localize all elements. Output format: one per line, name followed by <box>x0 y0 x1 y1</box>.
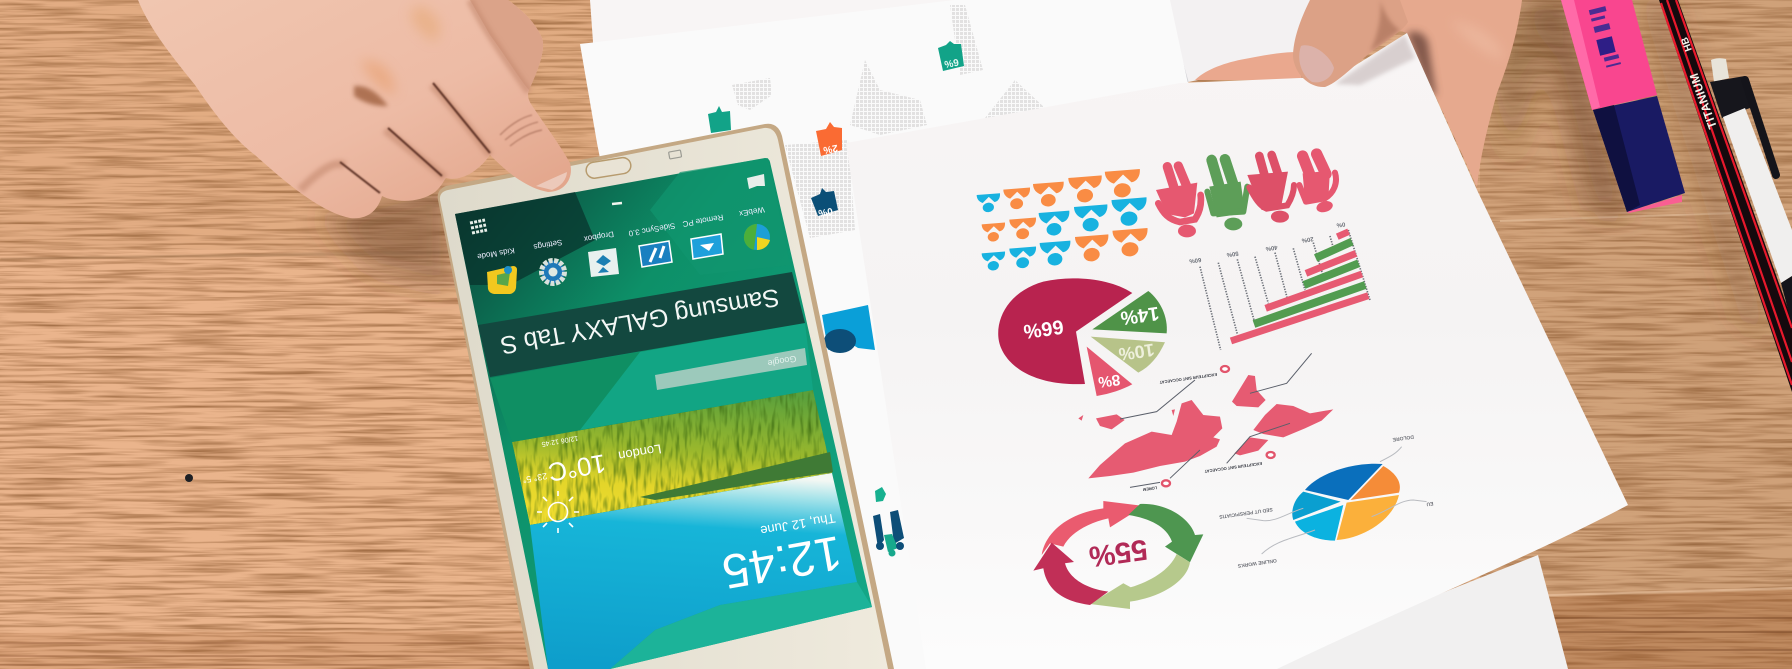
home button <box>585 157 632 179</box>
black and red pencil: HB <box>1680 35 1695 53</box>
app icon: Dropbox: Dropbox <box>583 229 615 244</box>
finger shading <box>300 0 529 190</box>
black and red pencil: TITANIUM <box>1687 71 1720 131</box>
soft shadows on the desk <box>320 0 1770 340</box>
icon row: small inverted people <box>977 169 1148 270</box>
back finger <box>470 0 543 90</box>
notification flag icon <box>747 174 765 189</box>
barcode <box>1589 6 1621 68</box>
app icon: Kids Mode: Kids Mode <box>476 246 515 261</box>
front camera icon <box>669 150 682 159</box>
temperature: 10°C <box>546 448 608 488</box>
pink highlighter with navy cap <box>1561 0 1685 213</box>
clock 12:45: 12:45 <box>718 525 846 598</box>
colour pie chart with labels <box>1218 433 1434 568</box>
world map with callouts: LOREM <box>1142 485 1157 492</box>
circular arrows with 55% <box>1033 501 1203 609</box>
app icon: Settings: Settings <box>533 238 563 251</box>
app icon: Settings <box>533 238 564 284</box>
black and white pen <box>1710 58 1792 325</box>
tag: 2%: 2% <box>822 142 839 155</box>
weather widget: grass photo <box>512 390 832 525</box>
left hand <box>138 0 571 218</box>
forefinger of right hand <box>1195 52 1302 80</box>
tag: 6% <box>938 41 964 71</box>
horizontal bar chart: 60% <box>1188 256 1202 264</box>
date: Thu, 12 June <box>759 511 837 538</box>
app icon: Remote PC: Remote PC <box>682 212 724 229</box>
figure: pink person 2 <box>1247 155 1294 223</box>
horizontal bar chart: 20% <box>1300 235 1314 243</box>
knuckle shadow <box>354 86 388 106</box>
horizontal bar chart: 0% <box>1335 220 1346 228</box>
right hand thumb <box>1293 0 1408 87</box>
finger wrinkles <box>500 115 542 146</box>
world map with callouts: EXCEPTEUR SINT OCCAECAT <box>1159 372 1217 385</box>
app icon: SideSync: SideSync 3.0 <box>627 221 676 238</box>
app icon: WebEx <box>739 205 770 250</box>
page indicator <box>612 203 622 204</box>
figure: pink person 1 <box>1156 166 1201 237</box>
Samsung Galaxy Tab S banner: Samsung GALAXY Tab S <box>498 283 781 359</box>
search bar: Google <box>767 354 797 368</box>
tag: teal <box>708 106 731 133</box>
app icon: Dropbox <box>583 229 619 277</box>
icon: apps grid <box>470 220 487 233</box>
app icon: Remote PC <box>682 212 724 259</box>
wallpaper facets <box>455 158 872 669</box>
tablet <box>438 124 894 669</box>
paper with dotted world map <box>580 0 1188 669</box>
Samsung Galaxy Tab S banner <box>478 272 805 377</box>
horizontal bar chart: 50% <box>1225 250 1239 257</box>
colour pie chart with labels: ONLINE WORKS <box>1237 557 1277 568</box>
tablet body <box>438 124 894 669</box>
sky and clock panel <box>530 473 857 669</box>
tag: 0% <box>811 188 838 218</box>
update time: 12/06 12:45 <box>541 434 579 447</box>
app icon: WebEx: WebEx <box>739 205 765 218</box>
screen <box>455 158 872 669</box>
back paper bottom right sheet <box>1250 555 1568 669</box>
pie chart with 66% 14% 10% 8%: 14% <box>1119 302 1160 328</box>
colour pie chart with labels: EU <box>1426 500 1434 507</box>
app icon: SideSync <box>627 221 676 267</box>
colour pie chart with labels: DOLORE <box>1392 433 1414 442</box>
world map with callouts: EXCEPTEUR SINT OCCAECAT <box>1204 461 1262 474</box>
finger gaps <box>340 83 490 193</box>
horizontal bar chart <box>1188 220 1370 350</box>
pie chart with 66% 14% 10% 8%: 66% <box>1022 315 1065 342</box>
fingernail <box>536 172 567 190</box>
dotted map <box>732 5 1045 238</box>
knuckle glow <box>360 60 395 95</box>
blue pie fragment <box>822 305 875 353</box>
icon: sun <box>537 491 579 533</box>
pie chart with 66% 14% 10% 8% <box>998 278 1167 396</box>
figure: green person <box>1207 159 1247 230</box>
circular arrows with 55%: 55% <box>1087 532 1150 573</box>
tag: 2% <box>816 122 842 156</box>
figure: pink person 3 <box>1299 154 1336 214</box>
right hand palm behind the paper <box>1300 0 1522 187</box>
pie chart with 66% 14% 10% 8%: 8% <box>1097 371 1121 390</box>
horizontal bar chart: 40% <box>1264 244 1278 251</box>
colour pie chart with labels: SED UT PERSPICIATIS <box>1218 506 1273 519</box>
location: London <box>617 441 663 464</box>
search bar <box>655 348 807 390</box>
tag: 0%: 0% <box>817 205 834 218</box>
main infographic sheet <box>846 33 1628 669</box>
small teal marker <box>875 487 886 502</box>
tag: 6%: 6% <box>943 56 960 69</box>
black and red pencil <box>1659 0 1792 392</box>
pie chart with 66% 14% 10% 8%: 10% <box>1117 340 1156 364</box>
world map with callouts <box>1078 353 1333 492</box>
small figures <box>873 510 904 556</box>
back paper right sheet <box>1165 0 1310 82</box>
black ink blot on desk <box>185 474 193 482</box>
back paper top left <box>590 0 1190 140</box>
app icon: Kids Mode <box>476 246 517 294</box>
high and low: 23° 5° <box>522 471 548 485</box>
treeline <box>640 452 833 500</box>
